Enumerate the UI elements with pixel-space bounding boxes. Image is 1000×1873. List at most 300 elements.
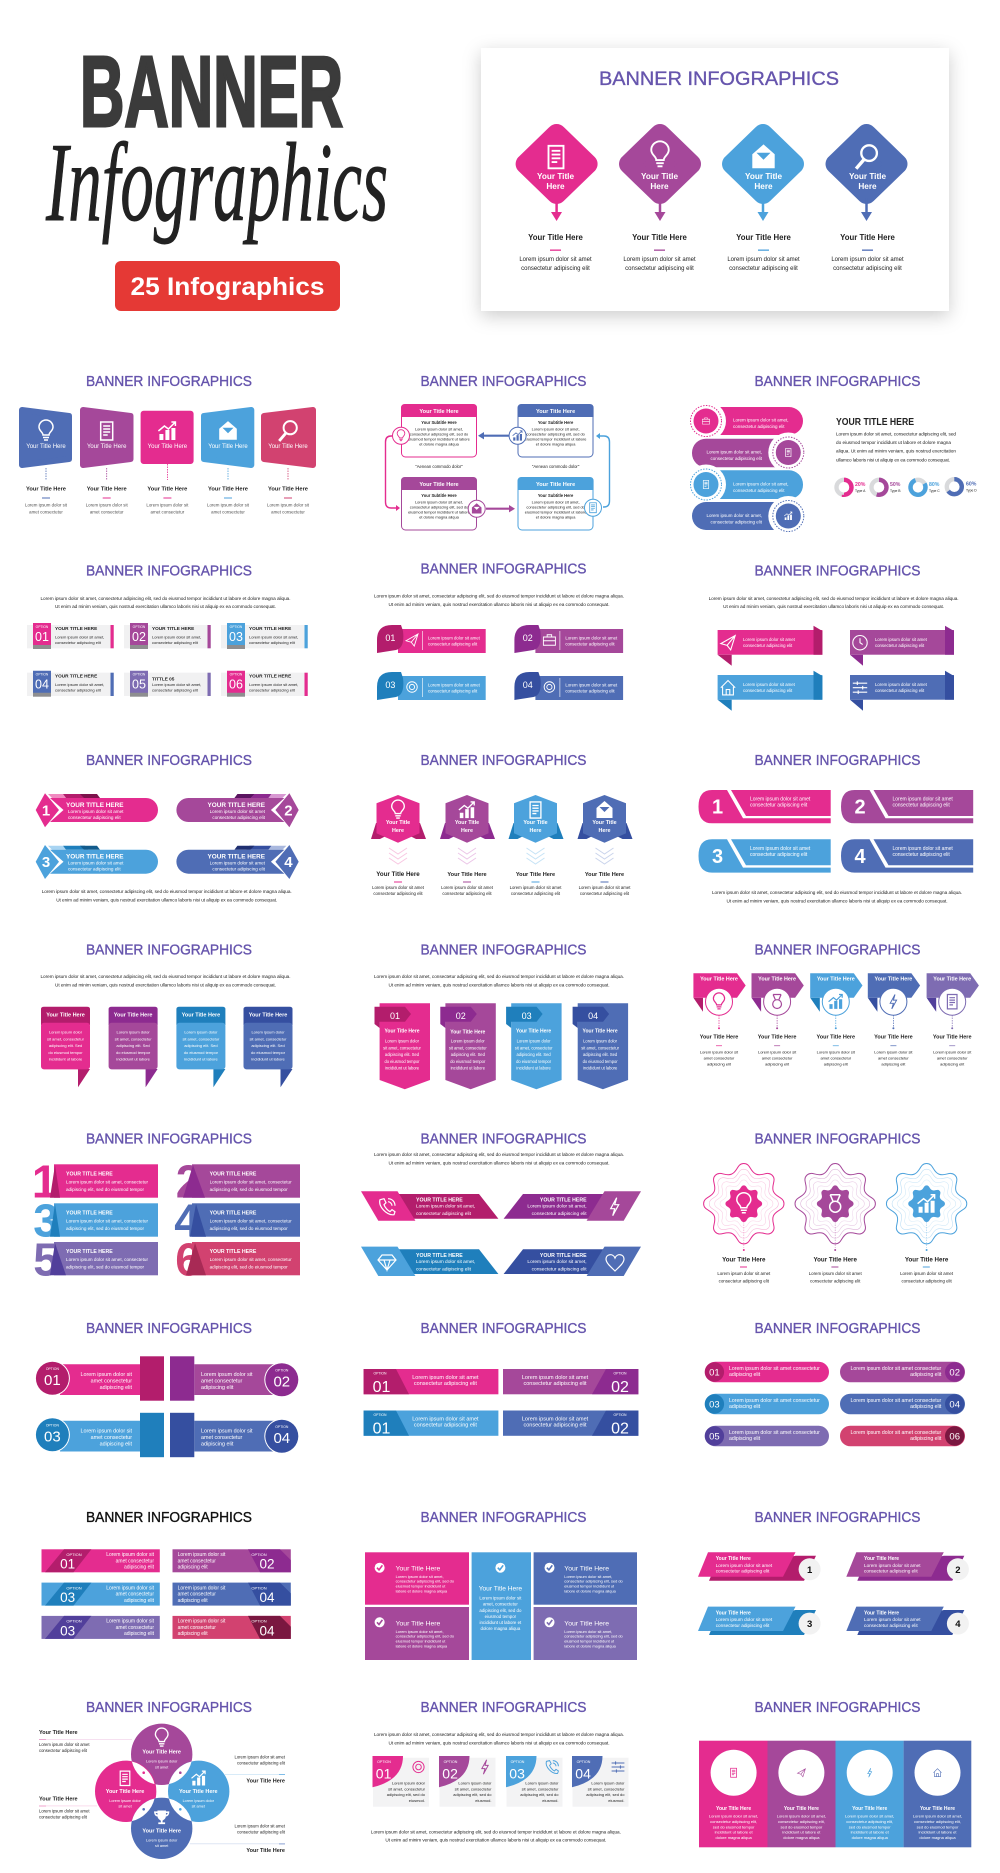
heading: BANNER INFOGRAPHICS — [599, 68, 839, 90]
tile violet: eiusmod tempor incididunt ut — [564, 1638, 615, 1644]
text block body: ullamco laboris nisi ut aliquip ex ea commodo consequat. — [836, 457, 950, 462]
venn icons — [120, 1728, 205, 1824]
block 04: OPTION — [275, 1425, 289, 1429]
venn labels: Your Title Here — [179, 1789, 218, 1795]
speech card 2 — [109, 1007, 158, 1087]
pill 06 — [840, 1426, 965, 1446]
card 04: YOUR TITLE HERE — [55, 674, 97, 679]
trapezoid labels: Your Title Here — [26, 444, 66, 450]
item text: Your Title Here — [26, 487, 66, 493]
flag 3: adipiscing elit — [824, 1062, 849, 1067]
slant card 02 — [172, 1549, 291, 1572]
tile blue: eiusmod tempor — [485, 1614, 517, 1619]
pill 05: adipiscing elit — [729, 1436, 761, 1442]
slant card 04: OPTION — [251, 1585, 267, 1590]
parallelogram 3: Your Title Here — [716, 1610, 751, 1616]
flow box 1: Lorem ipsum dolor sit amet, — [415, 426, 463, 432]
flow box 2: Lorem ipsum dolor sit amet, — [532, 426, 580, 432]
venn labels: sit amet — [118, 1805, 133, 1809]
card 2: adipiscing elit, sed do eiusmod tempor — [210, 1187, 288, 1192]
pill 3: Lorem ipsum dolor sit amet, — [733, 482, 789, 486]
ribbon 04: sit amet, consectetur — [581, 1045, 620, 1050]
intro text: Ut enim ad minim veniam, quis nostrud exercitation ullamco laboris nisi ut aliquip ex ea commodo consequat. — [55, 982, 276, 987]
item text: Your Title Here — [147, 487, 187, 493]
slant ribbon 4: consectetur adipiscing elit — [532, 1266, 587, 1272]
chevron pill 4: Lorem ipsum dolor sit amet — [210, 861, 266, 866]
card 1: 1 — [32, 1156, 57, 1208]
slant card 05: OPTION — [66, 1619, 82, 1624]
card 2: Lorem ipsum dolor sit amet, consectetur — [210, 1180, 292, 1185]
slant ribbon 2: Lorem ipsum dolor sit amet, — [527, 1204, 587, 1210]
parallelogram 3: 3 — [807, 1619, 812, 1630]
slant ribbon 2: YOUR TITLE HERE — [540, 1198, 587, 1204]
ribbon 03 — [506, 1003, 562, 1089]
donut charts — [836, 477, 962, 498]
intro text — [374, 1732, 624, 1745]
heading: BANNER INFOGRAPHICS — [420, 374, 586, 390]
flow box 1: Your Subtitle Here — [421, 420, 457, 425]
tile blue: Lorem ipsum dolor sit — [479, 1596, 522, 1600]
hero item 4: Your Title Here — [840, 233, 896, 242]
speech card 1: sit amet, consectetur — [47, 1036, 85, 1041]
pill 2 — [692, 432, 808, 472]
trapezoid shapes — [22, 410, 313, 465]
panel: ribbon tail banners — [709, 564, 959, 711]
venn callout: bottom right: Lorem ipsum dolor sit amet — [234, 1824, 286, 1829]
card 2 — [176, 1156, 300, 1208]
corner card 01: OPTION — [377, 1760, 391, 1764]
speech card 2: adipiscing elit. Sed — [116, 1043, 150, 1048]
venn callout: top right — [225, 1754, 286, 1785]
venn labels: Lorem ipsum dolor — [109, 1799, 141, 1803]
card 03: 03 — [229, 630, 243, 644]
flow box 2: consectetur adipiscing elit, sed do — [526, 432, 585, 436]
item text: Lorem ipsum dolor sit — [267, 503, 310, 508]
donut labels — [855, 482, 977, 493]
donut labels: 20% — [855, 482, 866, 488]
ribbon 04 — [573, 1003, 628, 1089]
pill 4 — [692, 496, 808, 536]
chevron pill 2: 2 — [284, 802, 293, 820]
slant ribbon 1: consectetur adipiscing elit — [416, 1211, 472, 1217]
banner 01: consectetur adipiscing elit — [428, 642, 478, 646]
card 3: 3 — [33, 1195, 59, 1247]
intro text — [40, 596, 290, 609]
corner card 04: 04 — [575, 1765, 591, 1781]
ribbon 4: consectetur adipiscing elit — [875, 688, 925, 693]
main title block — [45, 36, 388, 311]
tab 1: 1 — [712, 796, 723, 818]
slant card 02: amet consectetur — [178, 1558, 216, 1564]
badge 2 — [440, 795, 495, 896]
parallelogram 3: consectetur adipiscing elit — [716, 1623, 770, 1628]
parallelogram 1 — [698, 1552, 821, 1581]
column 1: sed do eiusmod tempor — [713, 1824, 755, 1829]
pill 4: consectetur adipiscing elit — [710, 520, 763, 524]
badge: 25 Infographics: 25 Infographics — [130, 273, 324, 301]
flag 5 — [927, 973, 979, 1067]
tile indigo: labore et dolore magna aliqua — [564, 1588, 617, 1594]
flow box 1: consectetur adipiscing elit, sed do — [410, 432, 468, 436]
heading: BANNER INFOGRAPHICS — [420, 562, 586, 578]
text block heading: YOUR TITLE HERE — [836, 417, 914, 428]
banner 04: consectetur adipiscing elit — [565, 688, 615, 694]
trapezoid labels: Your Title Here — [87, 444, 127, 450]
intro text — [40, 974, 290, 987]
bar 2: OPTION — [614, 1372, 627, 1376]
venn labels: sit amet — [192, 1805, 206, 1809]
tab 2: 2 — [855, 796, 866, 818]
column 1: Your Title Here — [716, 1806, 751, 1812]
hero item 3: Here — [754, 182, 773, 191]
block 04: amet consectetur — [201, 1435, 243, 1441]
block 03: Lorem ipsum dolor sit — [80, 1428, 133, 1434]
flow box 3: consectetur adipiscing elit, sed do — [410, 504, 468, 510]
item text: Lorem ipsum dolor sit — [25, 503, 68, 508]
heading: BANNER INFOGRAPHICS — [420, 1321, 586, 1337]
outro text — [42, 889, 292, 902]
card 06: consectetur adipiscing elit — [249, 688, 296, 693]
flow box 2: Your Subtitle Here — [538, 420, 574, 425]
panel: four colour columns — [699, 1700, 971, 1847]
ribbon 3 — [718, 671, 822, 711]
venn callout: top left: Your Title Here — [39, 1730, 78, 1736]
item text: amet consectetur — [90, 509, 124, 514]
pill 02: 02 — [949, 1368, 960, 1378]
chevron pill 3: consectetur adipiscing elit — [68, 866, 121, 871]
ribbon 02: Lorem ipsum dolor — [451, 1038, 485, 1043]
slant ribbon 4 — [504, 1247, 641, 1276]
ribbon 1: consectetur adipiscing elit — [743, 643, 793, 648]
tile pink: eiusmod tempor incididunt ut — [396, 1584, 446, 1588]
panel: option cards — [27, 564, 308, 697]
slant card 04: amet consectetur — [178, 1592, 216, 1598]
bar 1: consectetur adipiscing elit — [414, 1381, 477, 1387]
venn labels: Lorem ipsum dolor — [146, 1760, 178, 1764]
panel: stacked pills with donuts — [686, 374, 977, 536]
speech card 2: incididunt ut labore — [116, 1057, 151, 1062]
slant ribbon 2 — [504, 1191, 641, 1221]
badge 4: Your Title — [592, 820, 617, 826]
slant card 01: 01 — [60, 1557, 75, 1572]
heading: BANNER INFOGRAPHICS — [86, 1700, 252, 1716]
card 01: OPTION — [36, 625, 49, 629]
outro text: Ut enim ad minim veniam, quis nostrud exercitation ullamco laboris nisi ut aliquip ex ea commodo consequat. — [726, 898, 948, 903]
flow box 1: eiusmod tempor incididunt ut labore — [408, 436, 470, 442]
corner card 03: adipiscing elit, sed do — [520, 1792, 559, 1797]
block 01 — [35, 1356, 164, 1401]
heading: BANNER INFOGRAPHICS — [86, 753, 252, 769]
bar 3 — [364, 1410, 498, 1438]
card 6: YOUR TITLE HERE — [210, 1249, 257, 1255]
block 01: Lorem ipsum dolor sit — [80, 1372, 133, 1378]
ribbon 01: do eiusmod tempor — [384, 1059, 420, 1064]
heading: BANNER INFOGRAPHICS — [754, 564, 920, 580]
flag 5: Lorem ipsum dolor sit — [933, 1050, 972, 1055]
intro text: Ut enim ad minim veniam, quis nostrud exercitation ullamco laboris nisi ut aliquip ex ea commodo consequat. — [55, 604, 276, 609]
block 03: amet consectetur — [91, 1435, 132, 1441]
ribbon 01: incididunt ut labore — [385, 1066, 420, 1071]
hero item 2 — [623, 134, 696, 272]
flag 4: amet consectetur — [878, 1056, 909, 1061]
hero item 4 — [831, 134, 904, 272]
card 4: 4 — [174, 1195, 200, 1247]
speech card 3: Your Title Here — [182, 1012, 220, 1018]
panel: chevron number pills — [36, 753, 299, 902]
slant ribbon 4: YOUR TITLE HERE — [540, 1253, 587, 1259]
intro text: Ut enim ad minim veniam, quis nostrud exercitation ullamco laboris nisi ut aliquip ex ea commodo consequat. — [388, 1740, 610, 1745]
speech card 1 — [41, 1007, 90, 1087]
tile indigo: eiusmod tempor incididunt ut — [564, 1584, 615, 1588]
tile purple: labore et dolore magna aliqua — [396, 1644, 448, 1648]
flow box 4 — [518, 477, 594, 530]
tab 4: consectetur adipiscing elit — [892, 852, 950, 858]
column 4: Your Title Here — [920, 1806, 955, 1812]
column 3: incididunt ut labore et — [851, 1830, 890, 1835]
pill 05: Lorem ipsum dolor sit amet consectetur — [729, 1430, 820, 1436]
ribbon 2 — [850, 626, 954, 666]
item text: amet consectetur — [29, 509, 63, 514]
donut labels: Type D — [966, 488, 977, 492]
card 4 — [174, 1195, 300, 1247]
ribbon 01: Lorem ipsum dolor — [385, 1038, 420, 1043]
slant ribbon 3: Lorem ipsum dolor sit amet, — [416, 1259, 475, 1265]
venn labels: Lorem ipsum dolor — [183, 1799, 215, 1803]
heading: BANNER INFOGRAPHICS — [86, 1510, 252, 1526]
pill 04: Lorem ipsum dolor sit amet consectetur — [850, 1398, 942, 1404]
panel: six numbered pills — [705, 1321, 965, 1446]
tab 2 — [841, 790, 973, 823]
panel: vertical tag ribbons — [374, 943, 628, 1089]
intro text: Lorem ipsum dolor sit amet, consectetur adipiscing elit, sed do eiusmod tempor incididunt ut labore et dolore magna aliqua. — [374, 1732, 624, 1737]
tile blue: adipiscing elit, sed do — [479, 1608, 522, 1613]
card 05 — [124, 671, 211, 697]
badge 1: Lorem ipsum dolor sit amet — [372, 885, 425, 890]
venn labels: Your Title Here — [106, 1789, 144, 1795]
badge 2: Your Title Here — [447, 872, 487, 878]
heading: BANNER INFOGRAPHICS — [86, 1321, 252, 1337]
intro text: Ut enim ad minim veniam, quis nostrud exercitation ullamco laboris nisi ut aliquip ex ea commodo consequat. — [388, 1160, 610, 1165]
card 01 — [27, 623, 114, 649]
card 3 — [33, 1195, 158, 1247]
flag 4: Your Title Here — [874, 1034, 913, 1040]
card 03: OPTION — [230, 625, 243, 629]
venn labels: sit amet — [155, 1766, 169, 1770]
card 03: Lorem ipsum dolor sit amet, — [249, 634, 298, 639]
corner card 01: eiusmod. — [409, 1798, 425, 1803]
corner card 03: Lorem ipsum dolor — [525, 1780, 559, 1786]
column 2: sed do eiusmod tempor — [780, 1824, 823, 1829]
donut labels: Type C — [929, 489, 940, 493]
outro text — [712, 890, 962, 903]
intro text: Ut enim ad minim veniam, quis nostrud exercitation ullamco laboris nisi ut aliquip ex ea commodo consequat. — [388, 602, 610, 607]
flag 5: Your Title Here — [933, 977, 971, 983]
pill 05 — [705, 1426, 829, 1446]
slant ribbon 3 — [361, 1247, 498, 1276]
ribbon 02: Your Title Here — [450, 1030, 486, 1036]
block 03: adipiscing elit — [100, 1442, 132, 1448]
flag 2: adipiscing elit — [765, 1062, 790, 1067]
card 03 — [221, 623, 308, 649]
banner 02 — [514, 625, 623, 653]
bar 4 — [503, 1410, 638, 1438]
flow box 3: Lorem ipsum dolor sit amet, — [415, 500, 463, 504]
outro text: Lorem ipsum dolor sit amet, consectetur adipiscing elit, sed do eiusmod tempor incididunt ut labore et dolore magna aliqua. — [712, 890, 962, 895]
card 6 — [175, 1233, 300, 1285]
tile violet: consectetur adipiscing elit, sed do — [564, 1634, 623, 1638]
slant card 02: 02 — [259, 1557, 275, 1572]
flow captions: "Aenean commodo dolor" — [415, 464, 463, 469]
block 04: Lorem ipsum dolor sit — [201, 1428, 253, 1434]
chevron pill 1: Lorem ipsum dolor sit amet — [68, 809, 124, 814]
hero item 3 — [727, 134, 800, 272]
column 2: consectetur adipiscing elit, — [778, 1819, 825, 1824]
chevron pill 1: consectetur adipiscing elit — [68, 815, 121, 820]
pill 03: 03 — [709, 1400, 720, 1410]
venn callout: bottom left: Your Title Here — [39, 1797, 78, 1803]
flag 5: amet consectetur — [937, 1056, 968, 1061]
card 1: adipiscing elit, sed do eiusmod tempor — [66, 1187, 144, 1192]
banner 04 — [514, 672, 623, 700]
corner card 03: OPTION — [511, 1760, 525, 1764]
corner card 02: 02 — [442, 1765, 458, 1781]
panel: slanted ribbons — [361, 1132, 641, 1276]
badge 1: consectetur adipiscing elit — [373, 891, 423, 896]
heading: BANNER INFOGRAPHICS — [754, 753, 920, 769]
column 2: Lorem ipsum dolor sit amet, — [777, 1814, 826, 1819]
flag 1: adipiscing elit — [707, 1062, 732, 1067]
block 04: adipiscing elit — [201, 1442, 234, 1448]
speech card 1: incididunt ut labore — [49, 1057, 83, 1062]
trapezoid icons — [39, 420, 297, 441]
heading: BANNER INFOGRAPHICS — [420, 943, 586, 959]
heading: BANNER INFOGRAPHICS — [86, 374, 252, 390]
pill 04: 04 — [949, 1400, 960, 1410]
hero item 4: Lorem ipsum dolor sit amet — [831, 257, 904, 263]
card 5: adipiscing elit, sed do eiusmod tempor — [66, 1264, 144, 1270]
pill 05: 05 — [709, 1432, 720, 1442]
donut labels: 50% — [890, 482, 901, 488]
ribbon 01 — [374, 1003, 430, 1089]
ribbon 04: Your Title Here — [583, 1029, 618, 1035]
flow box 1 — [401, 404, 477, 457]
hero item 1 — [519, 134, 592, 272]
card 06: YOUR TITLE HERE — [249, 674, 291, 679]
badge 4 — [578, 795, 632, 896]
panel: speech cards — [40, 943, 292, 1087]
panel: slanted option cards — [42, 1510, 291, 1639]
ribbon 1: Lorem ipsum dolor sit amet — [743, 637, 796, 642]
tile pink: Lorem ipsum dolor sit amet, — [396, 1574, 444, 1579]
flow box 4: eiusmod tempor incididunt ut labore — [525, 510, 586, 514]
hero item 4: Your Title — [849, 172, 886, 181]
column 3 — [836, 1741, 904, 1847]
ribbon 01: adipiscing elit. Sed — [385, 1052, 420, 1057]
venn labels: Your Title Here — [142, 1828, 181, 1834]
slant card 03: adipiscing elit — [124, 1598, 155, 1604]
banner 03: 03 — [385, 680, 395, 690]
slant card 03: Lorem ipsum dolor sit — [106, 1585, 155, 1591]
slant card 01 — [42, 1549, 160, 1572]
venn callout: bottom right: consectetur adipiscing elit — [237, 1830, 286, 1835]
pill 04: adipiscing elit — [910, 1404, 942, 1410]
title: Infographics script: Infographics — [45, 121, 388, 245]
bar 4: 02 — [611, 1420, 629, 1438]
corner card 04: sit amet, consectetur — [588, 1786, 625, 1792]
slant card 02: Lorem ipsum dolor sit — [178, 1552, 226, 1558]
heading: BANNER INFOGRAPHICS — [754, 943, 920, 959]
star 1: Lorem ipsum dolor sit amet — [717, 1271, 771, 1276]
pill 2: consectetur adipiscing elit — [710, 456, 763, 461]
card 3: adipiscing elit, sed do eiusmod tempor — [66, 1226, 144, 1231]
chevron pill 1 — [36, 793, 158, 827]
flag 4: Lorem ipsum dolor sit — [874, 1050, 913, 1055]
slant card 05: Lorem ipsum dolor sit — [106, 1619, 155, 1625]
outro text — [371, 1829, 621, 1843]
ribbon 02: incididunt ut labore — [451, 1066, 486, 1071]
badge 2: Lorem ipsum dolor sit amet — [441, 885, 494, 890]
ribbon 02: do eiusmod tempor — [450, 1059, 486, 1064]
slant ribbon 1: Lorem ipsum dolor sit amet, — [416, 1204, 475, 1210]
column 1: incididunt ut labore et — [715, 1830, 753, 1835]
card 01: Lorem ipsum dolor sit amet, — [55, 634, 104, 639]
tile indigo: Your Title Here — [564, 1566, 609, 1573]
block 01: 01 — [44, 1372, 61, 1389]
block 02: OPTION — [275, 1368, 289, 1372]
heading: BANNER INFOGRAPHICS — [754, 1510, 920, 1526]
flag 4: adipiscing elit — [881, 1062, 906, 1067]
venn circles — [95, 1724, 229, 1859]
parallelogram 2: Your Title Here — [864, 1556, 899, 1562]
tab 3 — [698, 839, 831, 873]
column 4: dolore magna aliqua — [919, 1835, 956, 1840]
slant ribbon 1: YOUR TITLE HERE — [416, 1198, 463, 1204]
column 1: dolore magna aliqua — [715, 1835, 752, 1840]
card 5: Lorem ipsum dolor sit amet, consectetur — [66, 1257, 148, 1262]
panel: corner option cards — [371, 1700, 628, 1843]
panel: five-tile grid — [365, 1510, 637, 1660]
bar 2: 02 — [611, 1379, 629, 1396]
corner card 04: adipiscing elit, sed do — [586, 1792, 625, 1797]
parallelogram 1: Your Title Here — [716, 1556, 751, 1562]
badge 3: Your Title Here — [516, 872, 555, 878]
ribbon 03: Your Title Here — [516, 1029, 551, 1035]
venn labels — [106, 1750, 218, 1848]
block 04: 04 — [273, 1430, 290, 1447]
item text: Lorem ipsum dolor sit — [146, 503, 189, 508]
slant card 05: amet consectetur — [116, 1625, 154, 1631]
speech card 1: adipiscing elit. Sed — [49, 1043, 82, 1048]
card 2: 2 — [176, 1156, 201, 1208]
flow box 3: eiusmod tempor incididunt ut labore — [408, 510, 470, 514]
slant card 02: adipiscing elit — [178, 1564, 208, 1570]
ribbon 03: do eiusmod tempor — [516, 1059, 552, 1064]
card 04 — [27, 671, 114, 697]
hero item 1: Your Title — [537, 172, 574, 181]
tile pink: labore et dolore magna aliqua — [396, 1588, 448, 1594]
card 05: consectetur adipiscing elit — [152, 688, 199, 693]
tile purple: Your Title Here — [396, 1621, 441, 1628]
speech card 4: do eiusmod tempor — [251, 1050, 286, 1055]
flag 3: Your Title Here — [816, 1034, 855, 1040]
venn callout: bottom left: Lorem ipsum dolor sit amet — [39, 1809, 90, 1814]
banner 02: 02 — [523, 633, 533, 643]
item text — [25, 487, 310, 514]
star 3: Lorem ipsum dolor sit amet — [900, 1271, 954, 1276]
speech card 2: sit amet, consectetur — [115, 1036, 152, 1041]
badge: 25 Infographics — [115, 261, 340, 311]
ribbon 04: incididunt ut labore — [583, 1066, 618, 1071]
